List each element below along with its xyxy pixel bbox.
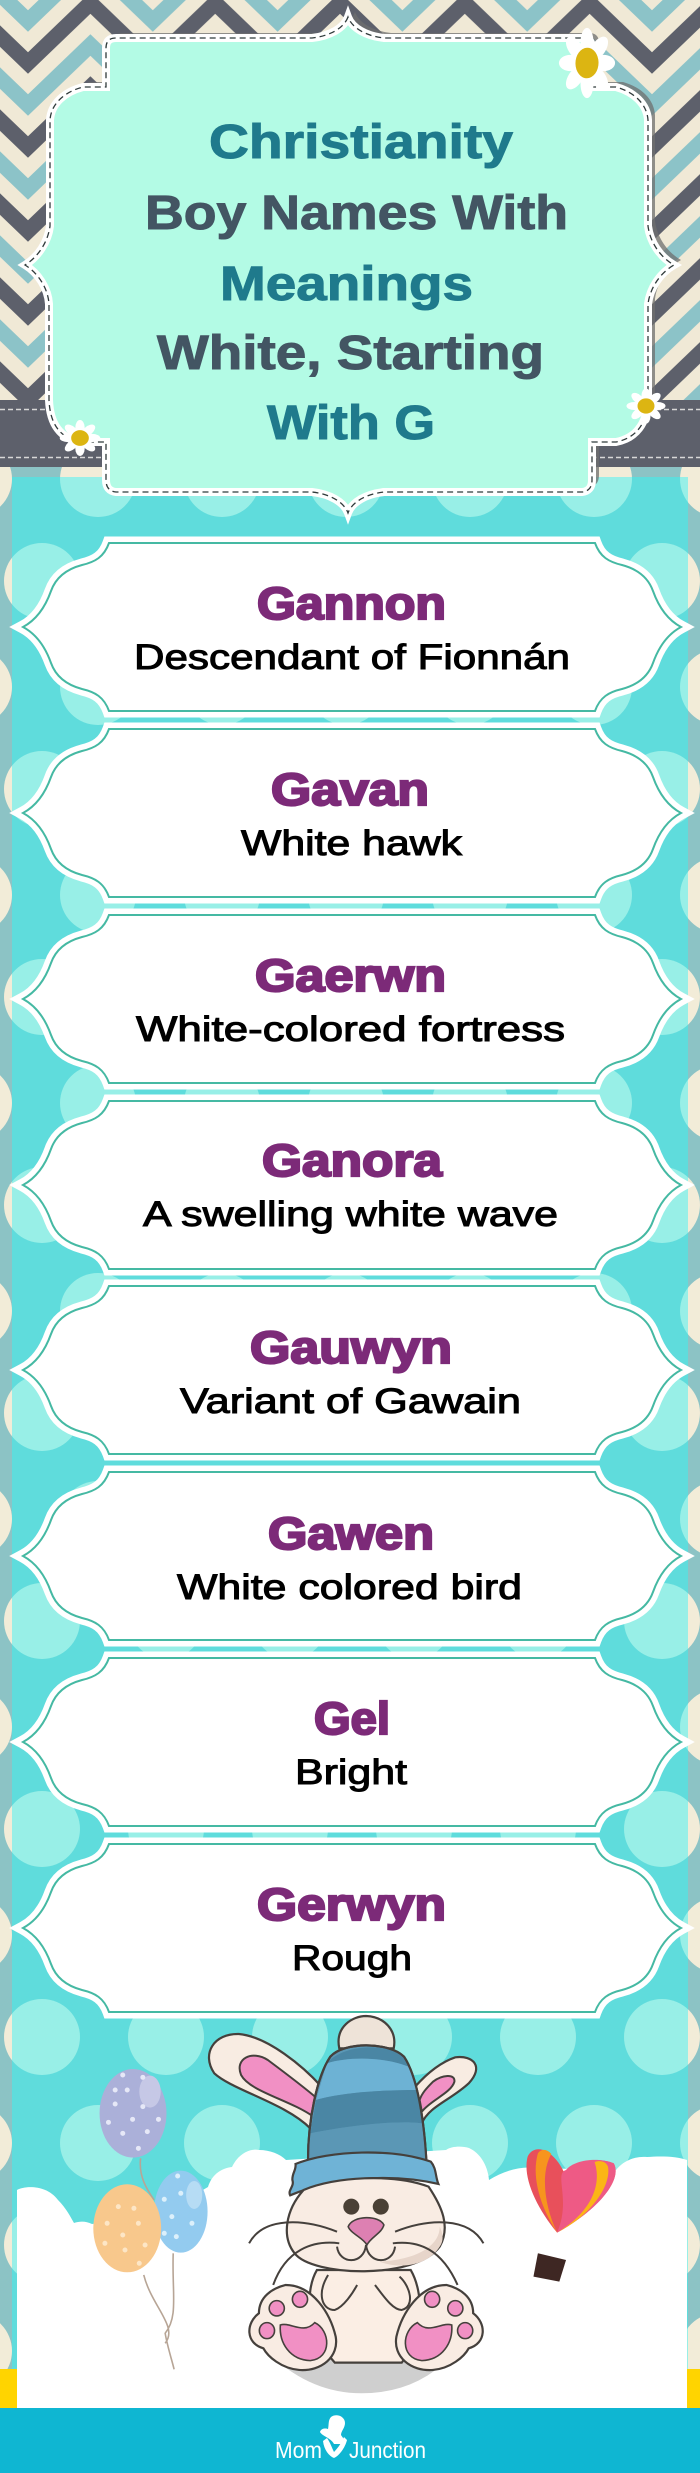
yellow corner left — [0, 2369, 17, 2408]
title: White, Starting — [157, 327, 544, 380]
heart balloon — [526, 2149, 616, 2233]
white cloud ground — [17, 2147, 687, 2408]
card: Gaerwn: Gaerwn — [255, 950, 446, 1001]
title: Boy Names With — [145, 187, 568, 240]
orange balloon — [93, 2184, 161, 2272]
logo icon — [320, 2415, 347, 2458]
logo wordmark — [275, 2437, 426, 2463]
blue balloon — [154, 2171, 208, 2253]
right ear — [415, 2057, 476, 2123]
nose — [348, 2218, 384, 2245]
panel: title plaque — [25, 12, 681, 513]
card: Gannon: Gannon — [257, 578, 446, 629]
bunny body — [310, 2270, 420, 2363]
icon: daisy bottom left — [60, 420, 100, 456]
card: Gaerwn: White-colored fortress — [136, 1010, 565, 1049]
card: Ganora — [23, 1101, 681, 1269]
card: Ganora: A swelling white wave — [143, 1195, 558, 1234]
card: Gavan: Gavan — [271, 764, 429, 815]
title: Christianity — [209, 116, 513, 169]
background: polka dot outer layer — [0, 467, 700, 2408]
card: Gerwyn: Rough — [292, 1939, 412, 1978]
logo wordmark: Mom — [275, 2437, 322, 2463]
title: Meanings — [220, 258, 473, 311]
yellow corner right — [687, 2369, 700, 2408]
card: Gauwyn: Gauwyn — [250, 1322, 452, 1373]
hat body — [308, 2045, 426, 2160]
bunny arms — [322, 2275, 410, 2310]
card: Gauwyn — [23, 1286, 681, 1454]
card: Gavan — [23, 729, 681, 897]
hat brim — [290, 2153, 438, 2195]
balloon strings — [140, 2158, 174, 2369]
purple balloon — [100, 2069, 167, 2158]
card: Gauwyn: Variant of Gawain — [180, 1382, 521, 1421]
left ear — [209, 2034, 321, 2128]
title: With G — [267, 397, 435, 450]
card: Gawen — [23, 1472, 681, 1640]
illustration: heart hot air balloon — [526, 2149, 616, 2282]
card: Ganora: Ganora — [262, 1135, 443, 1186]
title — [145, 116, 568, 450]
dark ribbon band — [0, 400, 700, 467]
card: Gannon: Descendant of Fionnán — [134, 638, 570, 677]
background: polka dot teal panel — [12, 477, 688, 2408]
card: Gerwyn: Gerwyn — [257, 1879, 446, 1930]
card: Gerwyn — [23, 1844, 681, 2012]
footer bar — [0, 2408, 700, 2473]
card: Gaerwn — [23, 915, 681, 1083]
card: Gel — [23, 1658, 681, 1826]
background: chevron pattern — [0, 0, 700, 400]
illustration: bunny with hat — [209, 2016, 483, 2393]
logo wordmark: Junction — [349, 2437, 426, 2463]
illustration: balloons — [93, 2069, 208, 2369]
bunny head — [287, 2178, 445, 2271]
card: Gel: Bright — [295, 1753, 407, 1792]
card: Gavan: White hawk — [241, 824, 463, 863]
card: Gannon — [23, 543, 681, 711]
eyes — [343, 2199, 389, 2215]
logo: MomJunction — [275, 2415, 426, 2463]
icon: daisy top right — [559, 28, 615, 98]
icon: daisy right — [626, 388, 666, 424]
card: Gawen: Gawen — [268, 1508, 434, 1559]
right foot — [396, 2285, 483, 2370]
card: Gel: Gel — [314, 1693, 390, 1744]
left foot — [249, 2285, 336, 2370]
mouth and whiskers — [249, 2222, 483, 2285]
balloon basket — [533, 2253, 566, 2282]
bunny shadow — [272, 2357, 451, 2393]
hat pompom — [339, 2016, 394, 2048]
card: Gawen: White colored bird — [177, 1568, 522, 1607]
